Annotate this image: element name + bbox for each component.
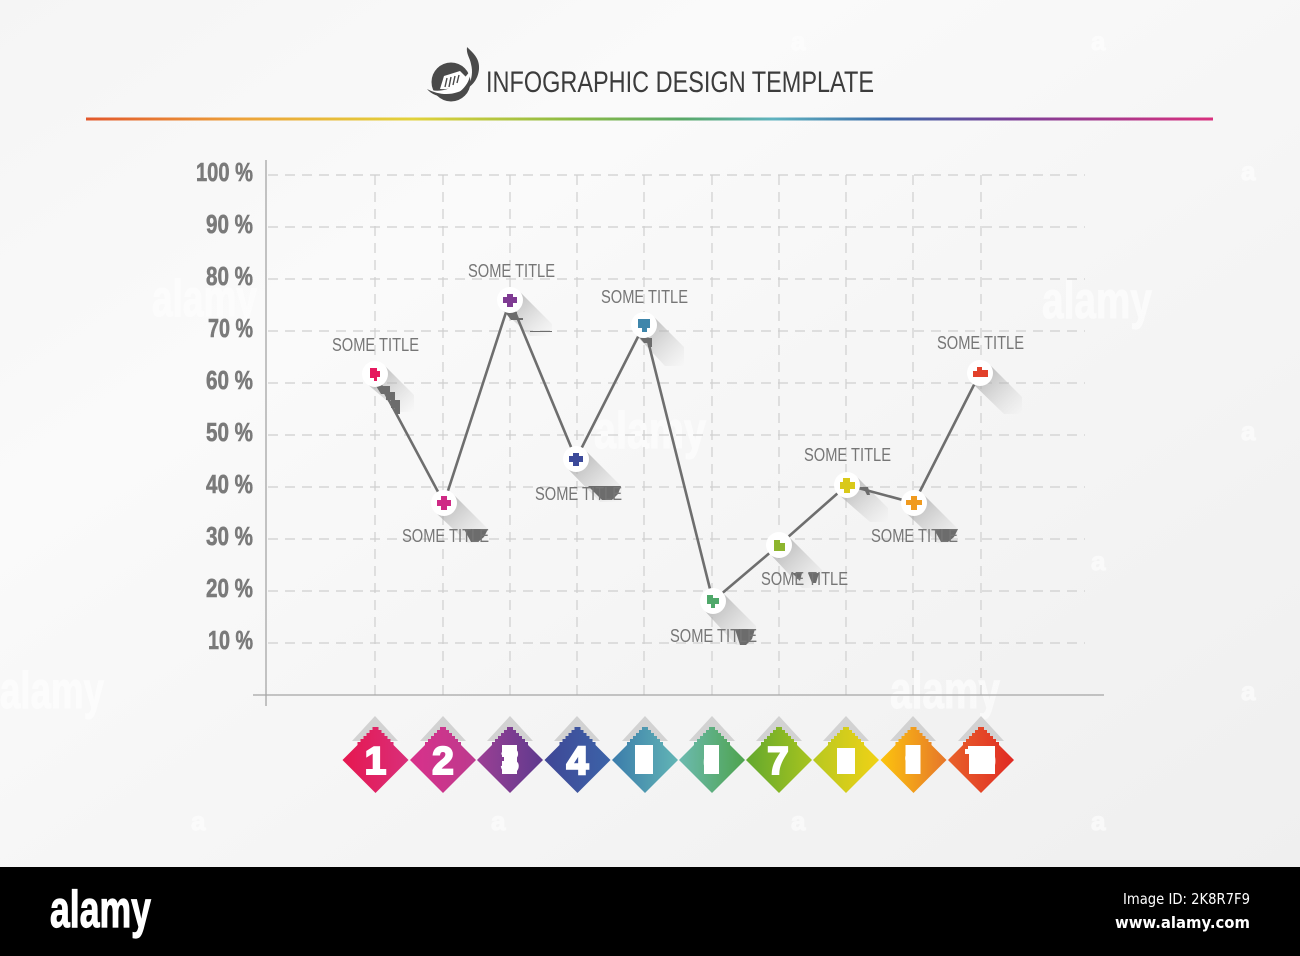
title: INFOGRAPHIC DESIGN TEMPLATE bbox=[486, 66, 874, 99]
watermark: a bbox=[791, 26, 806, 56]
diamond 6 bbox=[679, 727, 745, 793]
point 9 marker bbox=[901, 490, 927, 516]
diamond 7 bbox=[746, 727, 812, 793]
diamond 10 bbox=[948, 727, 1014, 793]
y axis labels: 10 % bbox=[208, 625, 253, 655]
point labels: SOME TITLE bbox=[937, 333, 1024, 353]
diamond 7: 7 bbox=[767, 740, 789, 783]
point labels: SOME TITLE bbox=[804, 445, 891, 465]
point 5 marker bbox=[631, 312, 657, 338]
point labels: SOME TITLE bbox=[761, 569, 848, 589]
point 4 marker bbox=[563, 446, 589, 472]
point 7 marker bbox=[766, 532, 792, 558]
long shadows of points bbox=[366, 291, 1022, 645]
watermark: a bbox=[1241, 416, 1256, 446]
watermark: a bbox=[791, 806, 806, 836]
diamond 4: 4 bbox=[567, 740, 589, 783]
watermark: alamy bbox=[0, 662, 104, 720]
point labels: SOME TITLE bbox=[871, 526, 958, 546]
diamond 10: 10 bbox=[968, 746, 996, 776]
watermark: a bbox=[491, 806, 506, 836]
axes bbox=[253, 160, 1104, 706]
stock photo footer bar bbox=[0, 867, 1300, 956]
diamond 5: 5 bbox=[636, 746, 652, 779]
y axis labels: 20 % bbox=[206, 573, 253, 603]
header logo: dark globe with swoosh bbox=[427, 47, 479, 102]
point 8 marker bbox=[834, 472, 860, 498]
watermark: alamy bbox=[890, 662, 1000, 720]
watermark: a bbox=[1091, 806, 1106, 836]
rainbow divider bbox=[86, 118, 1213, 120]
diamond 8 bbox=[813, 727, 879, 793]
y axis labels: 100 % bbox=[196, 157, 253, 187]
watermark: a bbox=[1241, 676, 1256, 706]
chart bbox=[196, 157, 1104, 706]
point 2 marker bbox=[431, 490, 457, 516]
diamond 9: 9 bbox=[904, 746, 921, 779]
watermark: a bbox=[1091, 26, 1106, 56]
diamond 4 bbox=[544, 727, 610, 793]
diamond 6: 6 bbox=[703, 746, 719, 779]
diamond 1: 1 bbox=[365, 740, 386, 783]
point labels: SOME TITLE bbox=[670, 626, 757, 646]
diamond 3: 3 bbox=[500, 740, 520, 781]
watermark: alamy bbox=[1042, 272, 1152, 330]
watermark: a bbox=[1241, 156, 1256, 186]
diamond 5 bbox=[612, 727, 678, 793]
y axis labels: 40 % bbox=[206, 469, 253, 499]
watermark: alamy bbox=[152, 270, 257, 328]
point labels: SOME TITLE bbox=[601, 287, 688, 307]
diamond 8: 8 bbox=[838, 746, 854, 779]
y axis labels: 30 % bbox=[206, 521, 253, 551]
point 1 marker bbox=[362, 361, 388, 387]
diamond 1 bbox=[342, 727, 408, 793]
data line bbox=[375, 300, 980, 601]
image id: Image ID: 2K8R7F9 bbox=[1123, 890, 1250, 908]
y axis labels: 60 % bbox=[206, 365, 253, 395]
point labels: SOME TITLE bbox=[332, 335, 419, 355]
dark stepped shadows on line bbox=[376, 312, 958, 645]
grey diamond tips bbox=[352, 716, 1004, 741]
diamond number row bbox=[342, 716, 1014, 793]
y axis labels: 50 % bbox=[206, 417, 253, 447]
diamond 3 bbox=[477, 727, 543, 793]
grid lines bbox=[268, 175, 1085, 695]
point 10 marker bbox=[967, 360, 993, 386]
y axis labels: 90 % bbox=[206, 209, 253, 239]
point labels bbox=[332, 261, 1024, 646]
y axis labels bbox=[196, 157, 253, 655]
y axis labels: 80 % bbox=[206, 261, 253, 291]
watermark: a bbox=[1091, 546, 1106, 576]
point 3 marker bbox=[497, 287, 523, 313]
footer url: www.alamy.com bbox=[1115, 913, 1250, 932]
y axis labels: 70 % bbox=[208, 313, 253, 343]
point labels: SOME TITLE bbox=[468, 261, 555, 281]
footer logo: alamy bbox=[50, 881, 151, 939]
point 6 marker bbox=[700, 588, 726, 614]
point labels: SOME TITLE bbox=[535, 484, 622, 504]
diamond 9 bbox=[880, 727, 946, 793]
diamond 2 bbox=[410, 727, 476, 793]
diamond 2: 2 bbox=[432, 740, 454, 783]
point labels: SOME TITLE bbox=[402, 526, 489, 546]
watermark: a bbox=[191, 806, 206, 836]
watermark: alamy bbox=[594, 402, 706, 460]
